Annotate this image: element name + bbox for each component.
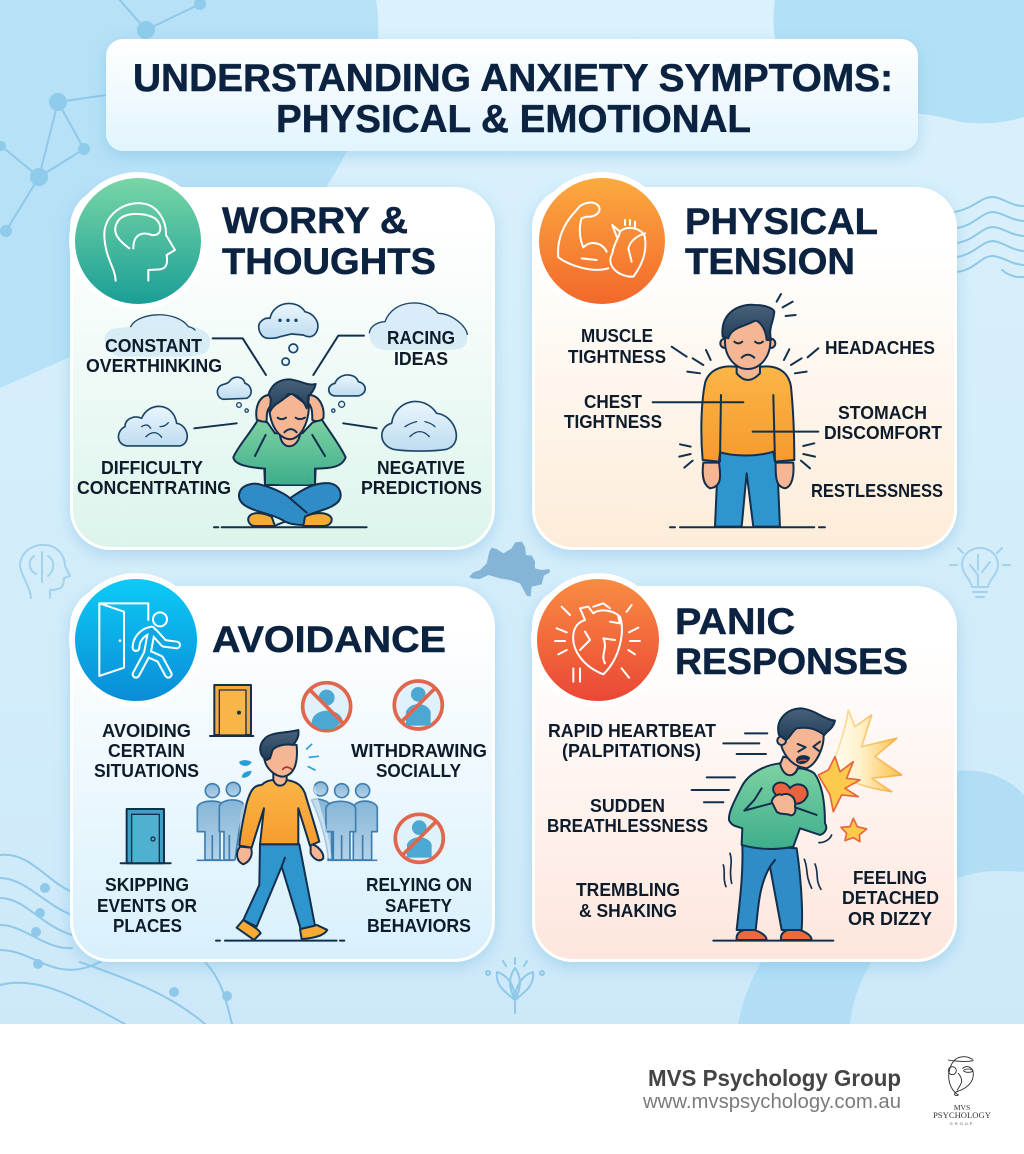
label: skipping events or places (97, 874, 197, 936)
illustration: person walking away (121, 681, 443, 941)
title text: PHYSICAL & EMOTIONAL (276, 98, 751, 141)
footer: logo (933, 1057, 991, 1126)
label: constant overthinking (86, 335, 222, 376)
label: feeling detached or dizzy (842, 867, 939, 929)
label: trembling and shaking: TREMBLING (576, 879, 680, 900)
label: rapid heartbeat: (PALPITATIONS) (562, 740, 701, 761)
label: difficulty concentrating: DIFFICULTY (101, 457, 204, 478)
panicking person (723, 708, 835, 940)
cloud behind constant overthinking (105, 315, 210, 357)
label: relying on safety behaviors (366, 874, 472, 936)
ground line (216, 938, 344, 944)
burst: large (832, 710, 902, 792)
heading: avoidance: AVOIDANCE (212, 618, 446, 660)
ground line (670, 524, 825, 530)
label: feeling detached or dizzy: FEELING (853, 867, 927, 888)
leader lines (653, 402, 818, 432)
crowd left (197, 782, 244, 860)
label: negative predictions (361, 457, 482, 498)
heading: panic responses: PANIC (675, 600, 795, 642)
label: trembling and shaking (576, 879, 680, 921)
label: trembling and shaking: & SHAKING (579, 900, 677, 921)
tense person (701, 305, 794, 527)
illustration: seated worried person with clouds (105, 303, 467, 527)
icon: beating heart (531, 573, 665, 707)
illustration: person in panic (692, 708, 902, 941)
label: negative predictions: PREDICTIONS (361, 477, 482, 498)
title text (133, 57, 893, 141)
label: muscle tightness (568, 325, 666, 367)
label: constant overthinking: OVERTHINKING (86, 355, 222, 376)
icon: no social 2 (394, 681, 442, 729)
label: stomach discomfort: DISCOMFORT (824, 422, 943, 443)
label: avoiding certain situations (94, 720, 199, 781)
walking person (237, 730, 332, 940)
footer: logo: PSYCHOLOGY (933, 1110, 991, 1120)
crowd right (312, 782, 377, 860)
label: stomach discomfort (824, 402, 943, 443)
cloud: frowning right (382, 401, 456, 451)
panel: panic responses (531, 573, 956, 960)
label: skipping events or places: SKIPPING (105, 874, 189, 895)
panel: physical tension (533, 172, 956, 548)
icon: door and walking person (69, 573, 203, 707)
label: stomach discomfort: STOMACH (838, 402, 927, 423)
heading: physical tension: PHYSICAL (685, 200, 878, 242)
label: skipping events or places: EVENTS OR (97, 895, 197, 916)
icon: no safety behaviors (395, 814, 443, 862)
cloud: top with dots (259, 303, 318, 365)
footer: organisation name: MVS Psychology Group (648, 1065, 901, 1091)
illustration: tense standing person (653, 294, 825, 527)
heading: panic responses (675, 600, 908, 682)
label: relying on safety behaviors: BEHAVIORS (367, 915, 471, 936)
label: sudden breathlessness: BREATHLESSNESS (547, 815, 708, 836)
label: muscle tightness: MUSCLE (581, 325, 653, 346)
label: rapid heartbeat (548, 720, 717, 761)
label: relying on safety behaviors: SAFETY (385, 895, 453, 916)
decoration: plant outline (486, 958, 544, 1013)
icon: head with brain (69, 172, 207, 310)
seated person (233, 379, 346, 526)
icon: muscle and heart (533, 172, 671, 310)
cloud: small right (329, 375, 365, 412)
decoration: flowing lines bottom left (0, 855, 232, 1024)
heading: physical tension: TENSION (685, 240, 855, 282)
label: withdrawing socially: SOCIALLY (376, 760, 462, 781)
label: avoiding certain situations: SITUATIONS (94, 760, 199, 781)
label: relying on safety behaviors: RELYING ON (366, 874, 472, 895)
decoration: light bulb outline (950, 548, 1010, 597)
label: negative predictions: NEGATIVE (377, 457, 465, 478)
heading: worry and thoughts (222, 199, 436, 282)
footer: logo: GROUP (950, 1121, 974, 1126)
heading: worry and thoughts: THOUGHTS (222, 240, 436, 282)
label: difficulty concentrating: CONCENTRATING (77, 477, 231, 498)
label: withdrawing socially (351, 740, 487, 781)
cloud: small left (217, 377, 251, 412)
speed lines (692, 733, 767, 802)
label: rapid heartbeat: RAPID HEARTBEAT (548, 720, 717, 741)
decoration: brain head outline (20, 545, 70, 598)
label: constant overthinking: CONSTANT (105, 335, 203, 356)
label: racing ideas: IDEAS (394, 348, 448, 369)
footer: website: www.mvspsychology.com.au (642, 1091, 901, 1113)
footer: logo: MVS (954, 1103, 970, 1112)
label: sudden breathlessness (547, 795, 708, 836)
heading: panic responses: RESPONSES (675, 640, 908, 682)
panel: worry and thoughts (69, 172, 494, 548)
decoration: wave lines right (955, 197, 1024, 277)
decoration: network nodes (0, 0, 206, 237)
panel: avoidance (69, 573, 494, 960)
icon: teal door (121, 809, 171, 863)
tension marks (672, 294, 818, 468)
burst: small (818, 757, 860, 812)
label: withdrawing socially: WITHDRAWING (351, 740, 487, 761)
label: feeling detached or dizzy: DETACHED (842, 887, 939, 908)
label: avoiding certain situations: CERTAIN (108, 740, 185, 761)
label: muscle tightness: TIGHTNESS (568, 346, 666, 367)
label: skipping events or places: PLACES (113, 915, 182, 936)
heading: physical tension (685, 200, 878, 282)
icon: no social 1 (303, 683, 351, 731)
footer (0, 1024, 1024, 1154)
label: headaches: HEADACHES (825, 337, 935, 358)
leader lines (194, 336, 377, 428)
cloud: frowning left (118, 406, 187, 446)
label: chest tightness: TIGHTNESS (564, 411, 662, 432)
title text: UNDERSTANDING ANXIETY SYMPTOMS: (133, 57, 893, 100)
label: racing ideas: RACING (387, 327, 455, 348)
heading: worry and thoughts: WORRY & (222, 199, 408, 241)
decoration: splash shape (469, 542, 550, 597)
cloud behind racing ideas (369, 303, 467, 350)
label: restlessness: RESTLESSNESS (811, 480, 943, 501)
icon: orange door (210, 685, 253, 736)
title banner (106, 39, 918, 151)
label: feeling detached or dizzy: OR DIZZY (848, 908, 933, 929)
label: difficulty concentrating (77, 457, 231, 498)
label: avoiding certain situations: AVOIDING (102, 720, 191, 741)
ground line (713, 938, 833, 944)
label: chest tightness (564, 391, 662, 432)
label: chest tightness: CHEST (584, 391, 643, 412)
ground line (214, 524, 367, 530)
label: racing ideas (387, 327, 455, 369)
label: sudden breathlessness: SUDDEN (590, 795, 665, 816)
star (841, 818, 867, 842)
